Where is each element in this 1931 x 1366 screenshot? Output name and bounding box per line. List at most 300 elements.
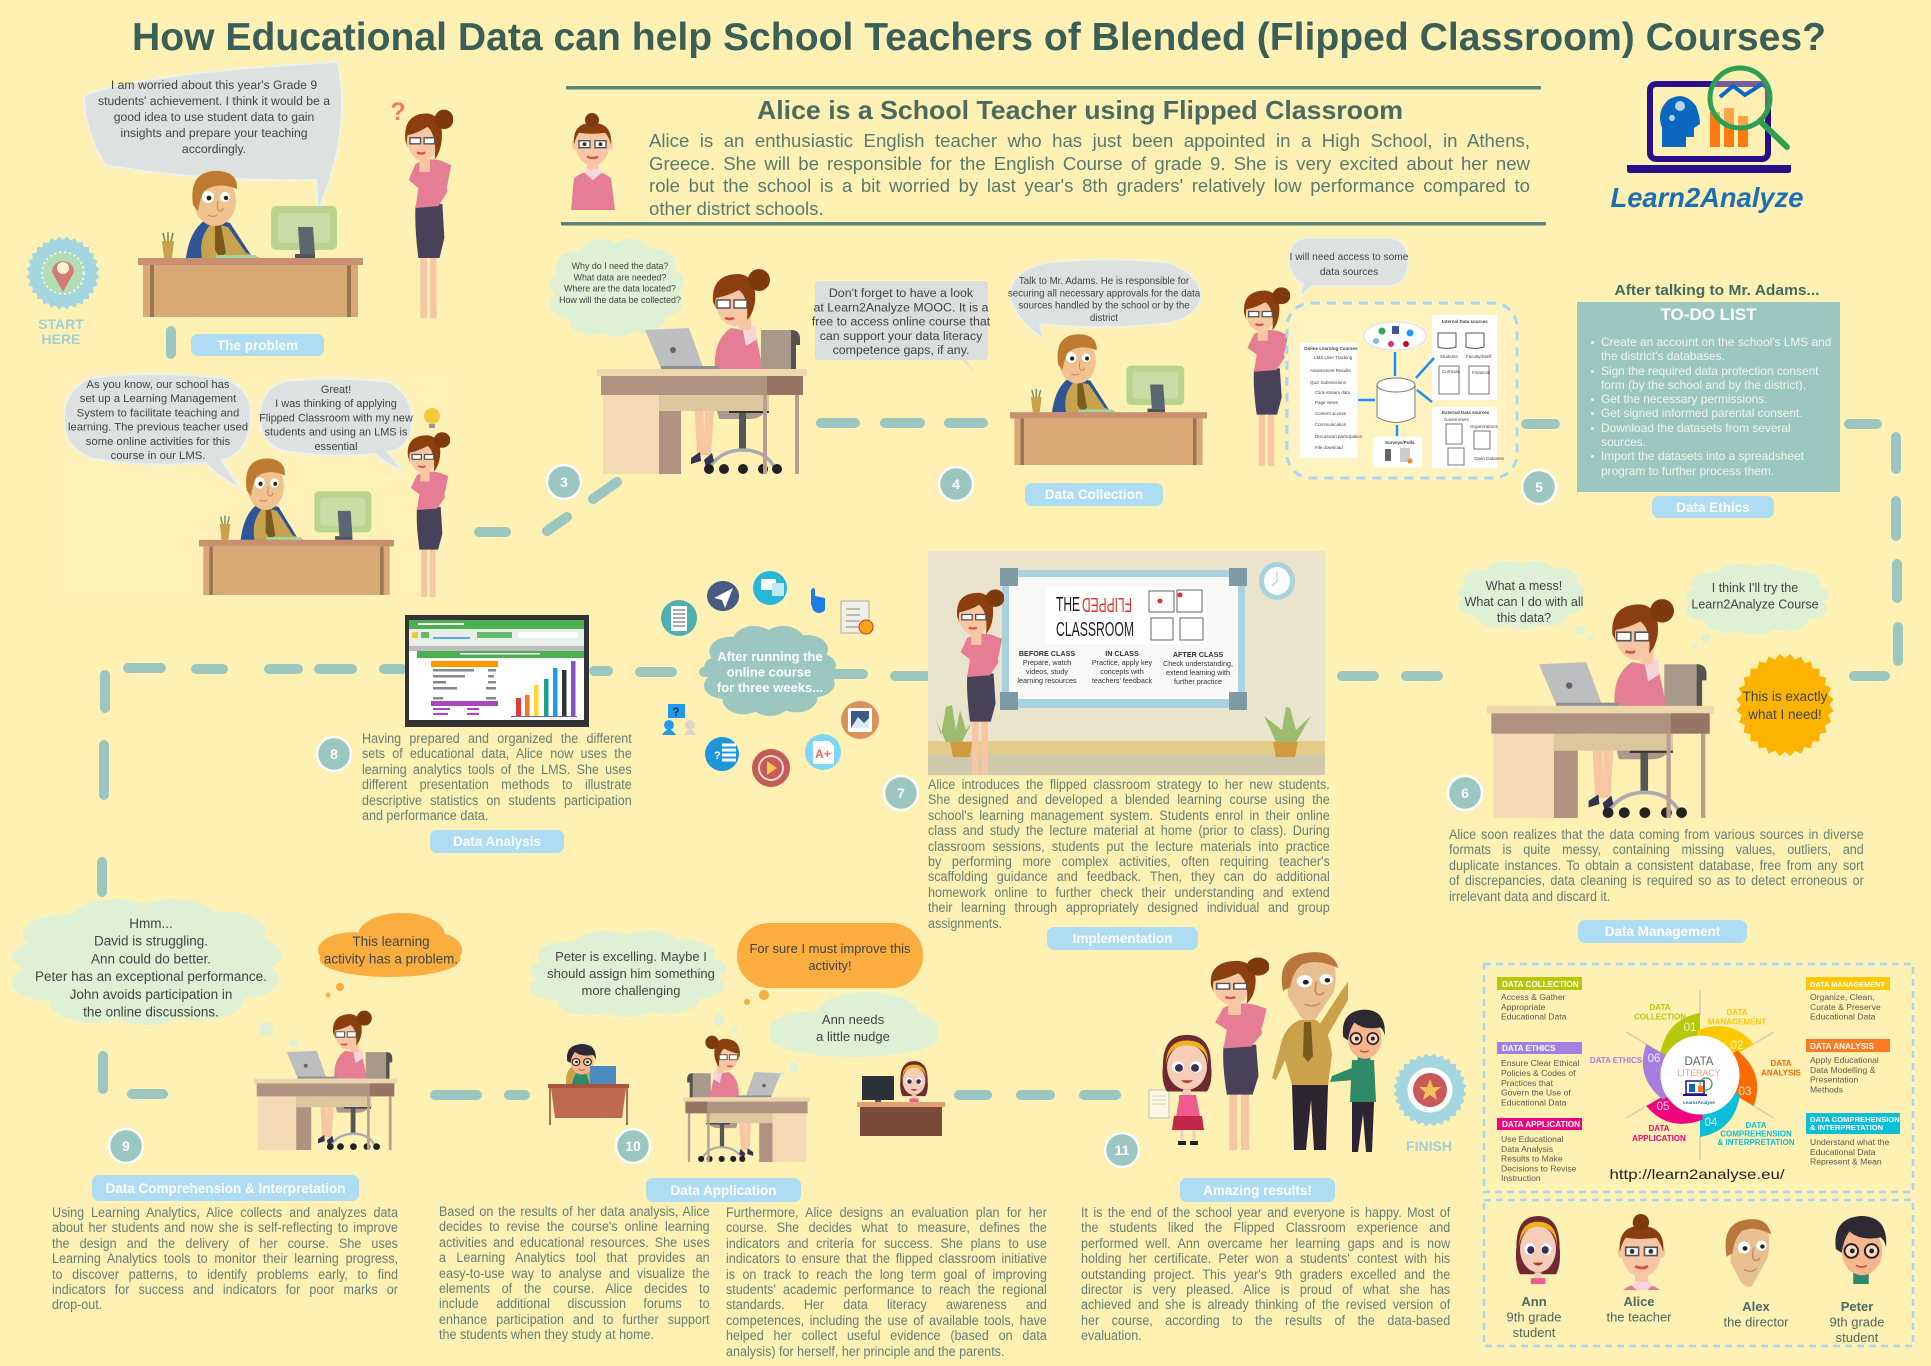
label: data application: Data Application xyxy=(670,1182,776,1198)
diagram: data sources: Communication xyxy=(1315,422,1347,427)
character: Alex: the director xyxy=(1723,1314,1789,1329)
wheel diagram: 01 xyxy=(1684,1022,1696,1034)
diagram: data sources: Curricula xyxy=(1442,369,1461,374)
cloud: Peter is excelling: should assign him something xyxy=(547,966,715,981)
tag: data ethics: Practices that xyxy=(1501,1078,1554,1088)
icon ring around online course: ? xyxy=(714,750,721,762)
thought dots xyxy=(259,983,344,1047)
step 10 text, right column: indicators to ensure that the flipped classroom initiative xyxy=(726,1251,1047,1266)
bubble: improve activity: For sure I must improve this xyxy=(749,941,911,956)
cloud: Peter is excelling: Peter is excelling. Maybe I xyxy=(555,949,707,964)
starburst callout xyxy=(1736,654,1834,756)
step number badges xyxy=(109,465,1556,1167)
speech bubble: flipped classroom: essential xyxy=(315,441,357,453)
to-do list panel: Download the datasets from several xyxy=(1601,421,1791,435)
Ann at desk xyxy=(857,1061,945,1136)
thought cloud: data questions: What data are needed? xyxy=(574,272,666,282)
step number badges: 6 xyxy=(1461,785,1469,801)
step 11 text: performed well. Ann overcame her learning gaps and is now xyxy=(1081,1236,1450,1251)
speech bubble: talk to Mr. Adams xyxy=(1008,260,1201,338)
step 8 text: different presentation methods to illustrate xyxy=(362,777,632,792)
flipped classroom scene: FLIPPED xyxy=(1082,593,1132,615)
flipped classroom scene: BEFORE CLASS xyxy=(1019,649,1075,658)
step 10 text, right column: is on track to reach the long term goal of improving xyxy=(726,1267,1047,1282)
label: data comprehension and interpretation: Data Comprehension & Interpretation xyxy=(105,1180,346,1196)
step number badges: 4 xyxy=(952,476,960,492)
title: How Educational Data can help School Teachers of Blended (Flipped Classroom) Courses? xyxy=(132,16,1826,59)
diagram: data sources: Open Datasets xyxy=(1474,456,1505,461)
step 11 text: evaluation. xyxy=(1081,1328,1142,1343)
icon: lightbulb xyxy=(424,408,440,428)
callout: MOOC tip: can support your data literacy xyxy=(820,329,983,343)
start rosette xyxy=(26,236,100,310)
tag: data collection: DATA COLLECTION xyxy=(1502,980,1579,989)
step 11 text: holding her certificate. Peter won a students' contest with his xyxy=(1081,1251,1450,1266)
step 7 text: their learning through appropriately designed individual and group xyxy=(928,900,1330,915)
label: data analysis xyxy=(430,830,564,853)
speech bubble: talk to Mr. Adams: Talk to Mr. Adams. He is responsible for xyxy=(1019,276,1190,287)
cloud: student analysis: Hmm... xyxy=(129,916,173,931)
speech bubble: director worried xyxy=(84,62,342,212)
label: amazing results xyxy=(1180,1178,1335,1202)
label: data ethics xyxy=(1652,496,1774,518)
step number badges: 8 xyxy=(330,746,338,762)
diagram: data sources: Discussion participation xyxy=(1315,434,1363,439)
speech bubble: director worried: good idea to use student data to gain xyxy=(114,110,314,124)
diagram: data sources: File download xyxy=(1315,445,1343,450)
diagram: data sources: Content access xyxy=(1315,411,1347,416)
flipped classroom scene: learning resources xyxy=(1017,676,1077,685)
director at desk, second scene xyxy=(199,459,394,595)
cloud: Peter is excelling xyxy=(530,931,727,1017)
step 7 text: assignments. xyxy=(928,916,1002,931)
cloud: student analysis: Peter has an exceptional performance. xyxy=(35,969,267,984)
tag: data ethics: Educational Data xyxy=(1501,1098,1567,1108)
panel: characters xyxy=(1484,1200,1913,1346)
intro paragraph: role but the school is a bit worried by last year's 8th graders' relatively low performance compared to xyxy=(649,175,1530,196)
tag: data application: DATA APPLICATION xyxy=(1502,1120,1580,1129)
cloud: learning activity problem: This learning xyxy=(352,934,430,949)
character: Peter xyxy=(1830,1216,1886,1345)
to-do list panel: program to further process them. xyxy=(1601,464,1774,478)
tag: data ethics: Govern the Use of xyxy=(1501,1088,1571,1098)
cloud: student analysis: Ann could do better. xyxy=(91,951,211,966)
start here label: HERE xyxy=(42,331,80,347)
wheel labels xyxy=(1590,1003,1802,1147)
speech bubble: data sources: I will need access to some xyxy=(1290,252,1409,263)
step 7 text xyxy=(928,777,1330,931)
to-do list panel: Get signed informed parental consent. xyxy=(1601,406,1803,420)
diagram: data sources: Organizations xyxy=(1470,424,1499,429)
tag: data management: DATA MANAGEMENT xyxy=(1810,980,1885,989)
tag: data collection: Appropriate xyxy=(1501,1002,1546,1012)
bubble: improve activity: activity! xyxy=(808,958,852,973)
thought dots xyxy=(1575,625,1711,649)
finish label: FINISH xyxy=(1406,1138,1452,1154)
finish rosette xyxy=(1393,1053,1467,1127)
thought cloud: data questions xyxy=(550,239,684,337)
step number badges: 7 xyxy=(897,785,905,801)
tag: data management: Educational Data xyxy=(1810,1012,1876,1022)
to-do list panel: Import the datasets into a spreadsheet xyxy=(1601,449,1804,463)
character: Peter: student xyxy=(1836,1330,1879,1345)
step 10 text, left column: the students when they study at home. xyxy=(439,1327,654,1342)
step 9 text: Learning Analytics tools to monitor their learning progress, xyxy=(52,1251,398,1266)
cloud: after running the online course: online course xyxy=(727,664,811,680)
icon ring around online course xyxy=(661,571,879,787)
wheel labels: ANALYSIS xyxy=(1761,1068,1802,1078)
step number badges: 10 xyxy=(625,1138,641,1154)
step 10 text, left column: include additional discussion forums to xyxy=(439,1296,710,1311)
label: data analysis: Data Analysis xyxy=(453,834,541,849)
cloud: after running the online course xyxy=(704,626,836,716)
wheel diagram: LITERACY xyxy=(1677,1068,1721,1078)
tag: data analysis: DATA ANALYSIS xyxy=(1810,1042,1874,1051)
step 7 text: by performing more complex activities, often requiring teacher's xyxy=(928,854,1330,869)
to-do list panel: form (by the school and by the district). xyxy=(1601,378,1806,392)
to-do list panel: Create an account on the school's LMS and xyxy=(1601,335,1831,349)
label: amazing results: Amazing results! xyxy=(1203,1182,1312,1198)
cloud: after running the online course: for three weeks... xyxy=(717,680,823,695)
intro paragraph: other district schools. xyxy=(649,198,824,219)
flipped classroom scene: AFTER CLASS xyxy=(1173,650,1223,659)
diagram: data sources: LMS User Tracking xyxy=(1314,355,1353,360)
flipped classroom scene: Practice, apply key xyxy=(1092,658,1153,667)
speech bubble: LMS xyxy=(64,374,251,488)
step 7 text: She designed and developed a blended learning course using the xyxy=(928,792,1330,807)
intro heading: Alice is a School Teacher using Flipped Classroom xyxy=(757,95,1403,125)
wheel diagram: 04 xyxy=(1705,1117,1718,1129)
speech bubble: LMS: As you know, our school has xyxy=(86,379,230,391)
diagram: data sources: Page views xyxy=(1315,400,1339,405)
wheel labels: DATA xyxy=(1649,1003,1671,1012)
starburst callout: This is exactly xyxy=(1743,689,1828,704)
step 10 text, right column: helped her collect useful evidence (based on data xyxy=(726,1328,1047,1343)
tag: data ethics: Policies & Codes of xyxy=(1501,1068,1576,1078)
step 6 text: Alice soon realizes that the data coming from various sources in diverse xyxy=(1449,827,1864,842)
diagram: data sources: Surveys/Polls xyxy=(1385,440,1415,445)
spreadsheet chart monitor xyxy=(405,615,589,727)
diagram: data sources: Students xyxy=(1440,354,1459,359)
icon ring around online course: ? xyxy=(672,705,680,719)
cloud: try the course xyxy=(1685,564,1829,634)
callout: MOOC tip: Don't forget to have a look xyxy=(829,286,974,300)
wheel labels: COLLECTION xyxy=(1634,1012,1686,1022)
step 7 text: homework online to further check their understanding and extend xyxy=(928,885,1330,900)
diagram: data sources: External Data sources xyxy=(1442,410,1490,415)
step 11 text: outstanding project. This year's 9th graders excelled and the xyxy=(1081,1267,1450,1282)
wheel labels: DATA xyxy=(1770,1059,1792,1068)
step 11 text: her course, according to the results of the data-based xyxy=(1081,1313,1450,1328)
callout: MOOC tip: at Learn2Analyze MOOC. It is a xyxy=(814,300,989,314)
speech bubble: data sources xyxy=(1289,238,1409,297)
speech bubble: data sources: data sources xyxy=(1320,267,1378,278)
tag: data application xyxy=(1497,1118,1582,1183)
step 7 text: school's learning management system. Students enrol in their online xyxy=(928,808,1330,823)
tag: data ethics: Ensure Clear Ethical xyxy=(1501,1058,1579,1068)
cloud: Ann needs nudge xyxy=(769,992,939,1057)
step 10 text, left column: easy-to-use way to analyse and visualize the xyxy=(439,1266,710,1281)
speech bubble: director worried: students' achievement. I think it would be a xyxy=(98,94,330,108)
callout: MOOC tip: competence gaps, if any. xyxy=(833,343,969,357)
step 9 text: indicators for success and indicators for poor marks or xyxy=(52,1282,398,1297)
Learn2Analyze logo: Learn2Analyze xyxy=(1610,182,1804,213)
step 10 text, left column: enhance participation and to further support xyxy=(439,1312,710,1327)
happy trio with certificate xyxy=(1149,952,1385,1152)
step 10 text, left column: a Learning Analytics tool that provides an xyxy=(439,1250,710,1265)
flipped classroom scene: extend learning with xyxy=(1166,668,1230,677)
label: the problem: The problem xyxy=(217,338,298,352)
tag: data comprehension: Educational Data xyxy=(1810,1147,1876,1157)
diagram: data sources: Assessment Results xyxy=(1310,368,1352,373)
tag: data collection xyxy=(1497,977,1582,1022)
speech bubble: LMS: learning. The previous teacher used xyxy=(68,422,248,434)
step 10 text, right column: indicators and criteria for success. She plans to use xyxy=(726,1236,1047,1251)
step 10 text, right column: analysis) for herself, her principle and the parents. xyxy=(726,1344,1004,1359)
character: Peter: Peter xyxy=(1841,1299,1873,1314)
speech bubble: flipped classroom xyxy=(259,379,413,470)
cloud: what a mess: What a mess! xyxy=(1486,579,1562,593)
speech bubble: director worried: accordingly. xyxy=(182,142,246,156)
intro paragraph: Alice is an enthusiastic English teacher who has just been appointed in a High School, in Athens, xyxy=(649,130,1530,151)
label: data ethics: Data Ethics xyxy=(1676,500,1750,514)
intro paragraph xyxy=(649,130,1530,219)
diagram: data sources: Internal Data sources xyxy=(1442,319,1488,324)
label: data collection xyxy=(1025,483,1163,506)
flipped classroom scene: THE xyxy=(1056,594,1080,616)
step 10 text, right column: students' academic performance to reach the regional xyxy=(726,1282,1047,1297)
Learn2Analyze logo xyxy=(1610,68,1804,213)
callout: MOOC tip: free to access online course that xyxy=(812,315,991,329)
step 11 text: It is the end of the school year and everyone is happy. Most of xyxy=(1081,1205,1450,1220)
tag: data analysis xyxy=(1806,1039,1890,1094)
speech bubble: talk to Mr. Adams: securing all necessary approvals for the data xyxy=(1008,288,1201,299)
bubble: improve activity xyxy=(737,923,923,988)
Alice portrait xyxy=(571,113,615,210)
wheel labels: DATA xyxy=(1648,1124,1670,1133)
tag: data analysis: Methods xyxy=(1810,1084,1843,1094)
step 9 text: drop-out. xyxy=(52,1297,102,1312)
wheel diagram: 05 xyxy=(1657,1101,1669,1113)
tag: data ethics: DATA ETHICS xyxy=(1502,1044,1556,1053)
starburst callout: what I need! xyxy=(1747,707,1822,722)
tag: data collection: Access & Gather xyxy=(1501,992,1566,1002)
step 10 text, left column: activities and educational resources. She uses xyxy=(439,1235,710,1250)
label: data application xyxy=(646,1178,801,1202)
character: Ann: student xyxy=(1513,1325,1556,1340)
step 11 text: the students liked the Flipped Classroom experience and xyxy=(1081,1220,1450,1235)
speech bubble: LMS: System to facilitate teaching and xyxy=(77,407,239,419)
cloud: student analysis: the online discussions. xyxy=(83,1004,219,1020)
icon ring around online course: A+ xyxy=(815,747,831,761)
director at desk, data collection xyxy=(1010,334,1207,465)
cloud: Peter is excelling: more challenging xyxy=(581,983,681,998)
step 11 text: director is very pleased. Alice is proud of what she has xyxy=(1081,1282,1450,1297)
tag: data application: Data Analysis xyxy=(1501,1144,1553,1154)
wheel labels: DATA ETHICS xyxy=(1590,1056,1643,1065)
cloud: Ann needs nudge: a little nudge xyxy=(816,1029,890,1044)
step 8 text: sets of educational data, Alice now uses the xyxy=(362,746,632,761)
tag: data application: Decisions to Revise xyxy=(1501,1163,1577,1173)
wheel diagram: 06 xyxy=(1648,1053,1660,1065)
step 7 text: class and study the lecture material at home (prior to class). During xyxy=(928,823,1330,838)
character: Ann: 9th grade xyxy=(1507,1309,1561,1324)
step number badges: 3 xyxy=(560,474,568,490)
diagram: data sources xyxy=(1287,303,1517,478)
Alice standing xyxy=(1244,287,1290,466)
header rule top xyxy=(566,86,1541,90)
tag: data comprehension: & INTERPRETATION xyxy=(1810,1123,1883,1132)
wheel diagram: 03 xyxy=(1739,1086,1751,1098)
label: the problem xyxy=(191,334,324,356)
tag: data analysis: Apply Educational xyxy=(1810,1055,1879,1065)
wheel diagram: 02 xyxy=(1731,1040,1743,1052)
step 8 text xyxy=(362,731,632,823)
tag: data management xyxy=(1806,977,1890,1022)
step 10 text, left column: elements of the course. Alice decides to xyxy=(439,1281,710,1296)
step 10 text, right column: standards. Her data literacy awareness and xyxy=(726,1297,1047,1312)
step 9 text xyxy=(52,1205,398,1312)
header rule bottom xyxy=(561,222,1546,226)
diagram: data sources: Click-stream data xyxy=(1315,390,1351,395)
speech bubble: LMS: course in our LMS. xyxy=(111,450,205,462)
character: Alex: Alex xyxy=(1742,1299,1770,1314)
character: Alice xyxy=(1606,1214,1672,1330)
cloud: try the course: Learn2Analyze Course xyxy=(1691,598,1819,612)
step 9 text: the design and the delivery of her course. She uses xyxy=(52,1236,398,1251)
to-do caption: After talking to Mr. Adams... xyxy=(1614,282,1820,299)
tag: data comprehension: Represent & Mean xyxy=(1810,1157,1882,1167)
flipped classroom scene: videos, study xyxy=(1026,667,1068,676)
step 10 text, left column: decides to revise the course's online learning xyxy=(439,1219,710,1234)
speech bubble: director worried: insights and prepare your teaching xyxy=(120,126,308,140)
intro paragraph: Greece. She will be responsible for the English Course of grade 9. She is very excited about her new xyxy=(649,153,1530,174)
flipped classroom scene: Check understanding, xyxy=(1163,659,1233,668)
cloud: what a mess: What can I do with all xyxy=(1465,595,1583,609)
step 11 text: achieved and she is already thinking of the revised version of xyxy=(1081,1297,1450,1312)
flipped classroom scene: IN CLASS xyxy=(1105,649,1139,658)
tag: data application: Instruction xyxy=(1501,1173,1541,1183)
tag: data collection: Educational Data xyxy=(1501,1012,1567,1022)
step 10 text, right column: course. She decides what to measure, defines the xyxy=(726,1220,1047,1235)
start here label: START xyxy=(38,316,84,332)
step number badges: 5 xyxy=(1535,479,1543,495)
label: data comprehension and interpretation xyxy=(92,1175,359,1201)
dashed path connecting the steps xyxy=(102,331,1898,1095)
step 8 text: Having prepared and organized the different xyxy=(362,731,632,746)
cloud: student analysis xyxy=(12,899,282,1025)
flipped classroom scene: CLASSROOM xyxy=(1056,619,1134,641)
panel: data literacy wheel xyxy=(1484,964,1913,1192)
wheel labels: APPLICATION xyxy=(1632,1134,1686,1143)
cloud: learning activity problem: activity has a problem. xyxy=(324,952,458,967)
step 6 text: irrelevant data and discard it. xyxy=(1449,889,1610,904)
speech bubble: flipped classroom: Flipped Classroom with my new xyxy=(259,412,413,424)
speech bubble: LMS: some online activities for this xyxy=(86,436,231,448)
cloud: what a mess xyxy=(1458,561,1585,629)
character: Alex xyxy=(1723,1219,1789,1329)
cloud: student analysis: David is struggling. xyxy=(94,934,208,949)
Alice with laptop, step 9 xyxy=(254,1011,397,1150)
Peter at desk xyxy=(548,1044,629,1125)
step 9 text: about her students and now she is self-reflecting to improve xyxy=(52,1220,398,1235)
wheel diagram: DATA xyxy=(1685,1056,1714,1068)
step 11 text xyxy=(1081,1205,1450,1343)
speech bubble: talk to Mr. Adams: district xyxy=(1090,313,1118,324)
tag: data ethics xyxy=(1497,1042,1582,1108)
Alice worried at desk xyxy=(1487,599,1714,818)
to-do list panel xyxy=(1577,302,1840,492)
character: Alice: Alice xyxy=(1623,1294,1655,1309)
to-do list panel: TO-DO LIST xyxy=(1660,305,1756,324)
flipped classroom scene xyxy=(928,551,1325,775)
director at desk xyxy=(138,171,363,317)
speech bubble: director worried: I am worried about this year's Grade 9 xyxy=(111,78,317,92)
character: Alice: the teacher xyxy=(1606,1309,1672,1324)
speech bubble: talk to Mr. Adams: sources handled by the school or by the xyxy=(1018,301,1190,312)
character: Peter: 9th grade xyxy=(1830,1314,1884,1329)
step 10 text, right column xyxy=(726,1205,1047,1359)
step number badges: 11 xyxy=(1115,1142,1130,1158)
thought cloud: data questions: Why do I need the data? xyxy=(572,261,668,271)
flipped classroom scene: further practice xyxy=(1174,677,1222,686)
tag: data analysis: Data Modelling & xyxy=(1810,1065,1876,1075)
wheel labels: MANAGEMENT xyxy=(1708,1018,1766,1026)
tag: data comprehension: Understand what the xyxy=(1810,1137,1890,1147)
question mark: ? xyxy=(390,98,406,126)
diagram: data sources: Online Learning Courses xyxy=(1304,346,1358,351)
cloud: student analysis: John avoids participation in xyxy=(70,987,232,1002)
speech bubble: flipped classroom: I was thinking of applying xyxy=(275,398,397,410)
flipped classroom scene: Prepare, watch xyxy=(1023,658,1071,667)
Alice with idea xyxy=(408,432,450,597)
cloud: Ann needs nudge: Ann needs xyxy=(822,1012,885,1027)
character: Ann: Ann xyxy=(1521,1294,1547,1309)
thought dots xyxy=(713,990,799,1078)
cloud: learning activity problem xyxy=(318,913,462,977)
to-do list panel: Get the necessary permissions. xyxy=(1601,392,1768,406)
tag: data management: Curate & Preserve xyxy=(1810,1002,1881,1012)
tag: data application: Results to Make xyxy=(1501,1154,1563,1164)
diagram: data sources: Government xyxy=(1444,417,1470,422)
step 10 text, right column: competences, including the use of available tools, have xyxy=(726,1313,1047,1328)
speech bubble: flipped classroom: students and using an LMS is xyxy=(265,427,408,439)
cloud: what a mess: this data? xyxy=(1497,611,1551,625)
website link: http://learn2analyse.eu/ xyxy=(1610,1166,1785,1182)
tag: data comprehension: DATA COMPREHENSION xyxy=(1810,1115,1900,1124)
Alice with laptop at desk xyxy=(597,269,807,474)
step number badges: 9 xyxy=(122,1138,130,1154)
diagram: data sources: Financial xyxy=(1472,370,1490,375)
wheel labels: DATA xyxy=(1745,1121,1767,1130)
step 7 text: Alice introduces the flipped classroom strategy to her new students. xyxy=(928,777,1330,792)
step 10 text, left column xyxy=(439,1204,710,1342)
label: data collection: Data Collection xyxy=(1045,487,1143,502)
wheel labels: DATA xyxy=(1726,1008,1748,1017)
tag: data management: Organize, Clean, xyxy=(1810,992,1874,1002)
step 10 text, right column: Furthermore, Alice designs an evaluation plan for her xyxy=(726,1205,1047,1220)
wheel diagram: LearnzAnalyse xyxy=(1683,1100,1715,1105)
label: data management: Data Management xyxy=(1605,924,1720,939)
tag: data analysis: Presentation xyxy=(1810,1075,1858,1085)
flipped classroom scene: concepts with xyxy=(1100,667,1144,676)
character: Ann xyxy=(1507,1216,1561,1340)
callout: MOOC tip xyxy=(812,281,991,372)
step 6 text: duplicate instances. To obtain a consistent database, free from any sort xyxy=(1449,858,1864,873)
Alice with laptop, step 10 xyxy=(683,1036,810,1162)
label: data management xyxy=(1578,920,1747,943)
speech bubble: flipped classroom: Great! xyxy=(321,384,351,396)
